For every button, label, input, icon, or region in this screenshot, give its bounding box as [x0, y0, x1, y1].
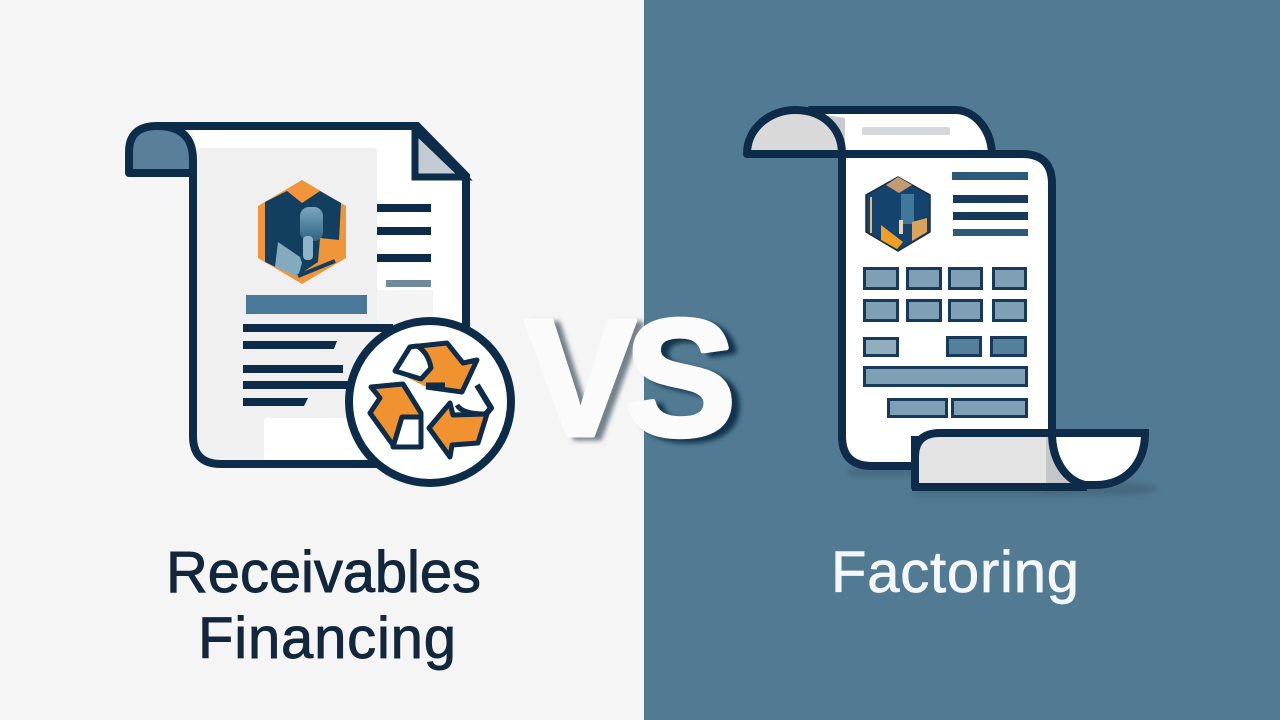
top roll bar — [862, 127, 950, 135]
top roll shadow — [826, 115, 845, 150]
inner grey side panel — [377, 290, 433, 360]
panel: left background — [0, 0, 644, 720]
recycle arrow: right — [429, 385, 491, 457]
icon: receivables document with recycle badge — [129, 126, 511, 483]
text lines right of logo — [377, 204, 431, 287]
recycle badge — [349, 321, 511, 483]
document outline — [155, 126, 466, 464]
scroll shadow — [848, 468, 1158, 496]
header lines — [952, 172, 1028, 236]
table cells — [864, 268, 1026, 416]
body text lines — [243, 324, 393, 406]
letter S: S — [625, 286, 736, 471]
folded corner — [415, 130, 464, 177]
heading line 1: Receivables — [166, 540, 481, 605]
inner grey panel — [197, 148, 377, 460]
heading line 2: Financing — [198, 606, 456, 671]
hexagon logo — [866, 177, 930, 251]
bottom roll — [915, 433, 1052, 487]
heading: receivables financing — [166, 540, 481, 671]
panel: right background — [644, 0, 1280, 720]
document sheet — [193, 127, 466, 464]
heading: factoring: Factoring — [831, 540, 1079, 605]
recycle arrow: left — [370, 384, 421, 447]
icon: factoring invoice scroll — [747, 110, 1158, 496]
top left roll — [129, 126, 193, 173]
bottom roll shadow — [1046, 437, 1085, 483]
recycle arrow: top — [395, 343, 477, 392]
bottom edge — [912, 483, 1087, 491]
bottom right curl — [1052, 433, 1145, 485]
letter V: V — [525, 286, 636, 471]
blue heading bar — [246, 295, 367, 314]
vs label — [525, 286, 736, 471]
top roll sheet — [815, 110, 992, 156]
invoice sheet — [842, 154, 1052, 466]
white footer block — [264, 418, 364, 461]
hexagon logo — [258, 180, 346, 284]
top left roll — [747, 110, 842, 154]
